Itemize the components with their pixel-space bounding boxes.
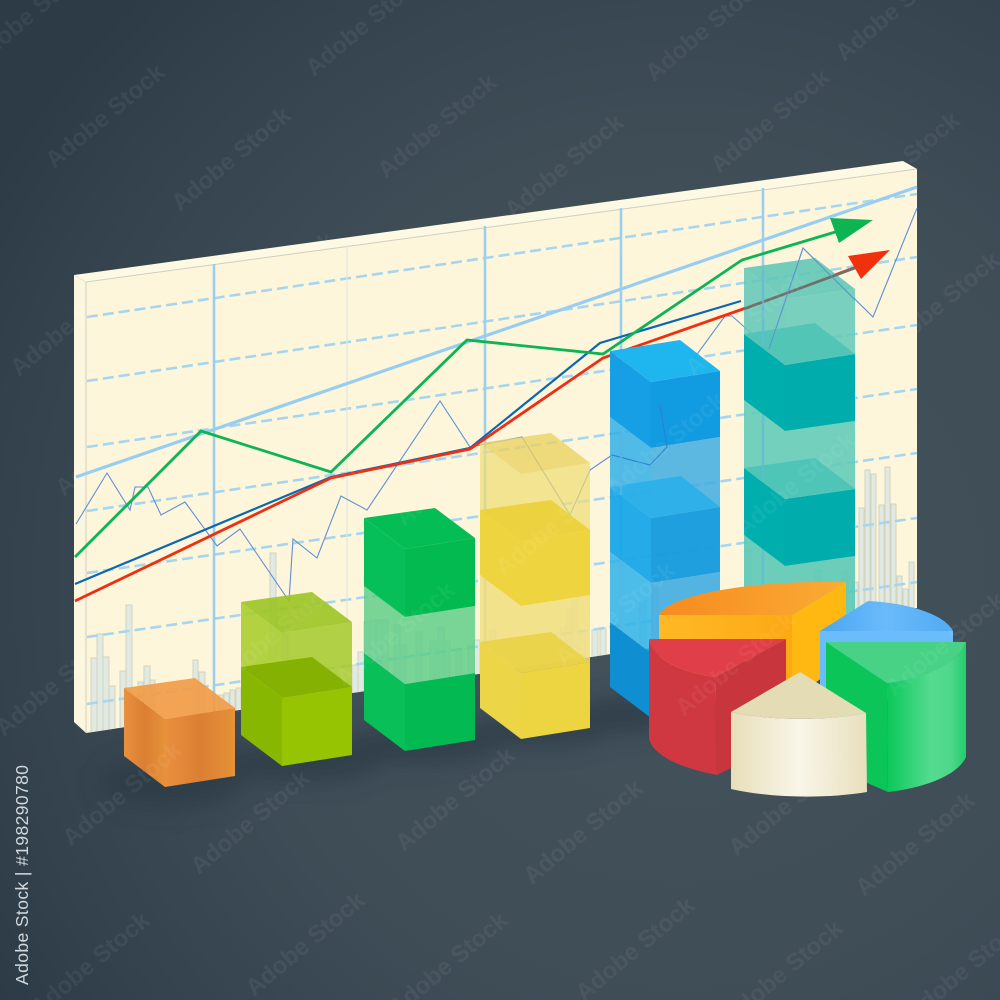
blue middle cube <box>610 487 651 583</box>
trend line: light blue <box>76 187 917 477</box>
blue middle top <box>610 476 720 518</box>
stock id text: Adobe Stock | #198290780 <box>12 765 32 985</box>
vertical grid lines <box>214 188 763 714</box>
green upper cube <box>364 518 405 617</box>
watermarks: Adobe Stock <box>730 426 861 542</box>
blue translucent upper <box>610 417 651 518</box>
trend line: green with arrow <box>75 218 873 557</box>
watermarks: Adobe Stock <box>260 436 391 552</box>
watermarks: Adobe Stock <box>705 63 836 179</box>
teal lower top <box>744 458 855 499</box>
watermarks: Adobe Stock <box>499 108 630 224</box>
watermarks: Adobe Stock <box>850 786 981 902</box>
teal lower cube <box>744 468 785 566</box>
pie chart: red slice <box>649 639 786 775</box>
watermarks: Adobe Stock <box>680 266 811 382</box>
panel: chart board <box>74 161 917 738</box>
watermarks: Adobe Stock <box>390 416 521 532</box>
blue translucent lower <box>610 552 651 653</box>
floor shadows <box>98 697 675 808</box>
watermarks: Adobe Stock <box>166 101 297 217</box>
watermarks: Adobe Stock <box>340 266 471 382</box>
watermarks: Adobe Stock <box>240 886 371 1000</box>
watermarks: Adobe Stock <box>490 466 621 582</box>
pie chart: orange slice <box>659 582 846 700</box>
yellow lower cube <box>480 642 521 739</box>
lime solid cube <box>241 667 282 766</box>
teal translucent middle <box>744 400 785 499</box>
watermarks: Adobe Stock <box>835 106 966 222</box>
column: green <box>364 508 475 751</box>
watermarks: Adobe Stock <box>57 736 188 852</box>
pie chart: blue slice <box>820 601 953 700</box>
yellow upper cube <box>480 510 521 606</box>
watermarks: Adobe Stock <box>518 774 649 890</box>
yellow translucent top <box>480 443 521 541</box>
teal translucent top <box>744 268 785 365</box>
watermarks: Adobe Stock <box>210 576 341 692</box>
pie chart: green slice <box>826 642 966 792</box>
blue lower cube <box>610 622 651 718</box>
watermarks: Adobe Stock <box>185 764 316 880</box>
column: yellow <box>480 433 590 739</box>
panel front <box>86 169 917 733</box>
teal upper cube <box>744 334 785 431</box>
watermarks: Adobe Stock <box>390 741 521 857</box>
trend line: thin zigzag <box>76 208 917 601</box>
column: blue <box>610 340 720 718</box>
yellow lower top <box>480 632 590 673</box>
trend line: red with arrow <box>75 250 890 601</box>
watermarks: Adobe Stock <box>550 556 681 672</box>
teal translucent bottom <box>744 535 785 640</box>
lime solid top <box>241 657 352 698</box>
yellow translucent middle <box>480 575 521 673</box>
watermarks: Adobe Stock <box>600 386 731 502</box>
watermarks: Adobe Stock <box>50 386 181 502</box>
dashed grid lines <box>87 194 917 704</box>
watermarks: Adobe Stock <box>210 226 341 342</box>
watermarks: Adobe Stock <box>330 576 461 692</box>
lime translucent cube <box>241 602 282 698</box>
panel top edge <box>74 161 917 282</box>
watermarks: Adobe Stock <box>550 206 681 322</box>
watermarks: Adobe Stock <box>670 606 801 722</box>
column: lime <box>241 592 352 766</box>
teal upper top <box>744 323 855 365</box>
background mini bar chart <box>91 467 914 738</box>
green translucent middle <box>364 586 405 684</box>
watermarks: Adobe Stock <box>40 58 171 174</box>
column: orange cube <box>124 678 235 787</box>
lines seen through translucent cubes <box>612 248 855 630</box>
pie chart: cream slice <box>731 672 867 797</box>
panel left edge <box>74 275 86 733</box>
trend line: dark blue <box>75 301 741 584</box>
blue top cube <box>610 351 651 448</box>
watermarks: Adobe Stock <box>723 746 854 862</box>
green lower cube <box>364 653 405 751</box>
column: teal <box>744 258 855 640</box>
watermarks: Adobe Stock <box>5 266 136 382</box>
watermarks: Adobe Stock <box>372 68 503 184</box>
